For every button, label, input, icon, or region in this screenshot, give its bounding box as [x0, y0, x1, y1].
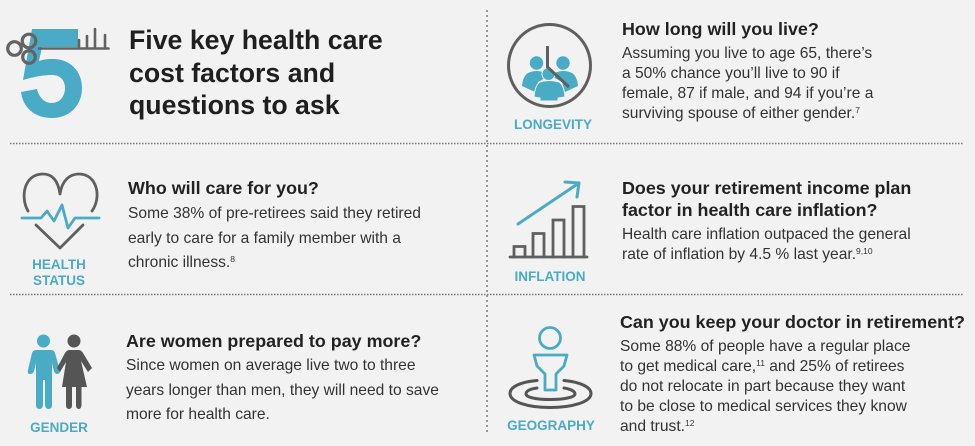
text: longevity body: female, 87 if male, and 94 if you’re a [622, 85, 873, 102]
text: doctor body: and trust.12 [620, 418, 694, 435]
text: who will care body: chronic illness.8 [128, 254, 235, 271]
heading: retirement income plan: factor in health care inflation? [622, 200, 877, 220]
text: longevity body [622, 45, 874, 122]
text: women body: Since women on average live two to three [126, 357, 416, 374]
text: who will care body: Some 38% of pre-retirees said they retired [128, 205, 421, 222]
label: health status: STATUS [33, 273, 85, 288]
label: health status: HEALTH [32, 257, 86, 272]
heading: retirement income plan: Does your retirement income plan [622, 178, 911, 198]
text: doctor body: to be close to medical services they know [620, 398, 907, 415]
text: longevity body: Assuming you live to age 65, there’s [622, 45, 872, 62]
text: doctor body [620, 338, 910, 435]
text: inflation body: rate of inflation by 4.5 % last year.9,10 [622, 246, 873, 263]
text: who will care body [128, 205, 421, 271]
icon: heart with pulse [20, 172, 100, 250]
icon: key and number 5 [6, 28, 110, 118]
title: questions to ask [129, 90, 340, 120]
heading: are women prepared: Are women prepared to pay more? [126, 331, 421, 351]
text: women body [126, 357, 439, 423]
text: longevity body: surviving spouse of either gender.7 [622, 105, 860, 122]
heading: how long will you live: How long will you live? [622, 19, 819, 39]
title [129, 25, 383, 120]
text: doctor body: to get medical care,11 and 25% of retirees [620, 358, 904, 375]
icon: man and woman [28, 334, 92, 409]
text: who will care body: early to care for a family member with a [128, 230, 401, 246]
title: cost factors and [129, 58, 335, 88]
text: inflation body [622, 226, 911, 263]
heading: keep your doctor: Can you keep your doctor in retirement? [620, 312, 965, 332]
label: longevity: LONGEVITY [514, 117, 592, 132]
text: women body: years longer than men, they will need to save [126, 382, 439, 398]
label: health status [32, 257, 86, 288]
text: women body: more for health care. [126, 406, 270, 423]
text: doctor body: Some 88% of people have a regular place [620, 338, 910, 355]
text: inflation body: Health care inflation outpaced the general [622, 226, 911, 243]
text: longevity body: a 50% chance you’ll live to 90 if [622, 65, 840, 82]
heading: retirement income plan [622, 178, 911, 220]
heading: who will care for you: Who will care for you? [128, 178, 319, 198]
label: inflation: INFLATION [514, 269, 586, 284]
label: gender: GENDER [30, 420, 88, 435]
label: geography: GEOGRAPHY [507, 418, 595, 433]
title: Five key health care [129, 25, 383, 55]
text: doctor body: do not relocate in part because they want [620, 378, 905, 395]
